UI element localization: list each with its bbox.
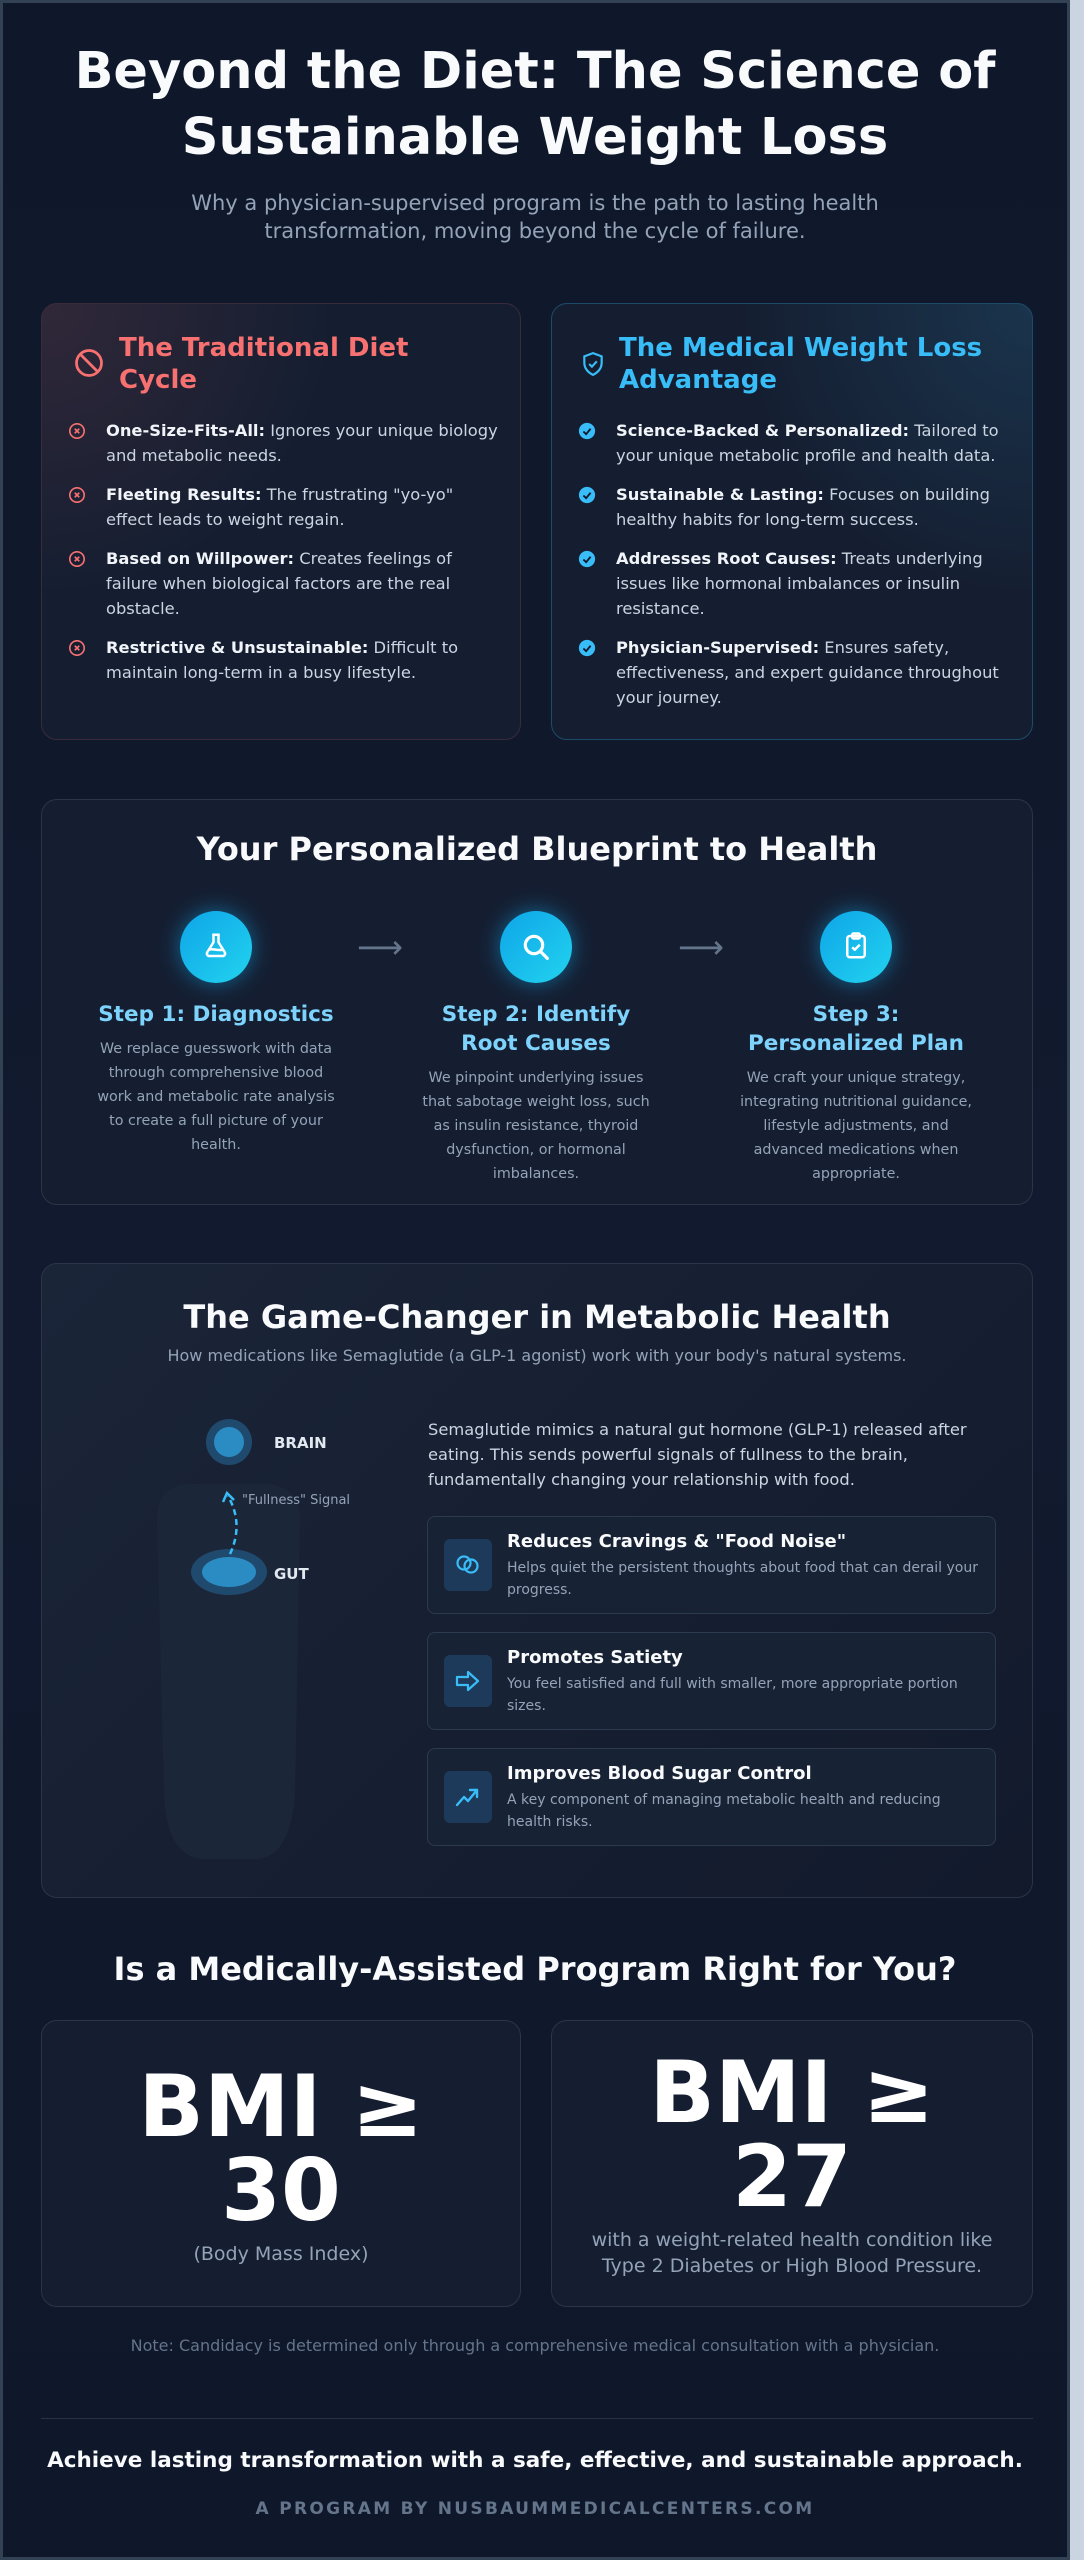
icon: step 1 flask [180, 911, 252, 983]
list: drawbacks: Based on Willpower: Creates feelings of failure when biological factors are the real obstacle. [106, 549, 452, 618]
step 2 text: We pinpoint underlying issues that sabotage weight loss, such as insulin resistance, thyroid dysfunction, or hormonal imbalances. [422, 1070, 650, 1182]
step 2 text [422, 1002, 650, 1182]
heading: traditional: Cycle [119, 365, 197, 395]
feature: satiety: You feel satisfied and full with smaller, more appropriate portion sizes. [507, 1676, 958, 1714]
step 1 text: We replace guesswork with data through comprehensive blood work and metabolic rate analysis to create a full picture of your health. [97, 1041, 335, 1153]
feature: blood sugar: Improves Blood Sugar Control [507, 1763, 812, 1784]
card: BMI 30: 30 [221, 2141, 341, 2241]
feature: satiety [427, 1632, 996, 1730]
heading: game-changer: The Game-Changer in Metabolic Health [183, 1298, 891, 1336]
arrow 1: ⟶ [357, 928, 403, 966]
list: benefits [578, 421, 999, 707]
subtitle: transformation, moving beyond the cycle of failure. [264, 219, 806, 243]
card: BMI 27: Type 2 Diabetes or High Blood Pressure. [602, 2255, 982, 2277]
panel: game-changer [41, 1263, 1033, 1898]
card: BMI 27 [551, 2020, 1033, 2307]
step 1 text: Step 1: Diagnostics [98, 1002, 334, 1027]
card: BMI 30: (Body Mass Index) [193, 2243, 368, 2265]
heading: medical: Advantage [619, 365, 777, 395]
title: Sustainable Weight Loss [182, 108, 888, 167]
list: benefits: Addresses Root Causes: Treats underlying issues like hormonal imbalances or insulin resistance. [616, 549, 983, 618]
diagram: brain-gut: BRAIN [274, 1434, 327, 1452]
footer tagline: Achieve lasting transformation with a safe, effective, and sustainable approach. [47, 2448, 1023, 2473]
note: Note: Candidacy is determined only through a comprehensive medical consultation with a physician. [131, 2336, 939, 2355]
list: drawbacks: One-Size-Fits-All: Ignores your unique biology and metabolic needs. [106, 421, 498, 465]
subtitle: Why a physician-supervised program is the path to lasting health [191, 191, 879, 215]
feature: reduces cravings [427, 1516, 996, 1614]
panel: traditional diet cycle [41, 303, 521, 740]
card: BMI 30 [41, 2020, 521, 2307]
list: drawbacks: Restrictive & Unsustainable: Difficult to maintain long-term in a busy lifestyle. [106, 638, 458, 682]
diagram: brain-gut: GUT [274, 1565, 309, 1583]
diagram: brain-gut [191, 1419, 350, 1595]
text: mechanism: Semaglutide mimics a natural gut hormone (GLP-1) released after eating. This sends powerful signals of fullness to the brain, fundamentally changing your relationship with food. [428, 1420, 967, 1489]
card: BMI 27: 27 [732, 2127, 852, 2227]
icon: shield check [583, 352, 603, 376]
panel: blueprint [41, 799, 1033, 1205]
heading: blueprint: Your Personalized Blueprint to Health [197, 830, 877, 868]
feature: blood sugar [427, 1748, 996, 1846]
step 3 text [740, 1002, 972, 1182]
list: drawbacks: effect leads to weight regain. [106, 510, 345, 529]
feature: reduces cravings: Helps quiet the persistent thoughts about food that can derail your progress. [507, 1560, 978, 1598]
step 3 text: Step 3: Personalized Plan [748, 1002, 964, 1056]
card: BMI 30: BMI ≥ [138, 2057, 424, 2157]
feature: reduces cravings: Reduces Cravings & "Food Noise" [507, 1531, 846, 1552]
list: benefits: Science-Backed & Personalized: Tailored to your unique metabolic profile and health data. [616, 421, 999, 465]
list: drawbacks: Fleeting Results: The frustrating "yo-yo" [106, 485, 453, 504]
card: BMI 27: with a weight-related health condition like [592, 2229, 992, 2251]
title [75, 42, 996, 167]
feature: blood sugar: A key component of managing metabolic health and reducing health risks. [507, 1792, 941, 1830]
heading: traditional [119, 333, 408, 395]
heading: medical: The Medical Weight Loss [619, 333, 982, 363]
list: benefits: Sustainable & Lasting: Focuses on building healthy habits for long-term success. [616, 485, 990, 529]
list: drawbacks [69, 421, 498, 682]
step 2 text: Step 2: Identify Root Causes [442, 1002, 630, 1056]
heading: candidacy: Is a Medically-Assisted Program Right for You? [114, 1950, 956, 1988]
icon: step 3 clipboard [820, 911, 892, 983]
heading: traditional: The Traditional Diet [119, 333, 408, 363]
icon: step 2 search [500, 911, 572, 983]
step 3 text: We craft your unique strategy, integrating nutritional guidance, lifestyle adjustments, and advanced medications when appropriate. [740, 1070, 972, 1182]
title: Beyond the Diet: The Science of [75, 42, 995, 101]
heading: medical [619, 333, 982, 395]
panel: medical weight loss advantage [551, 303, 1033, 740]
subheading: How medications like Semaglutide (a GLP-1 agonist) work with your body's natural systems. [167, 1346, 907, 1365]
arrow 2: ⟶ [678, 928, 724, 966]
subtitle [191, 191, 879, 243]
diagram: brain-gut: "Fullness" Signal [242, 1493, 350, 1508]
icon: ban [75, 349, 103, 377]
card: BMI 27: BMI ≥ [649, 2043, 935, 2143]
list: benefits: Physician-Supervised: Ensures safety, effectiveness, and expert guidance throughout your journey. [616, 638, 999, 707]
feature: satiety: Promotes Satiety [507, 1647, 683, 1668]
footer credit: A PROGRAM BY NUSBAUMMEDICALCENTERS.COM [256, 2499, 814, 2519]
